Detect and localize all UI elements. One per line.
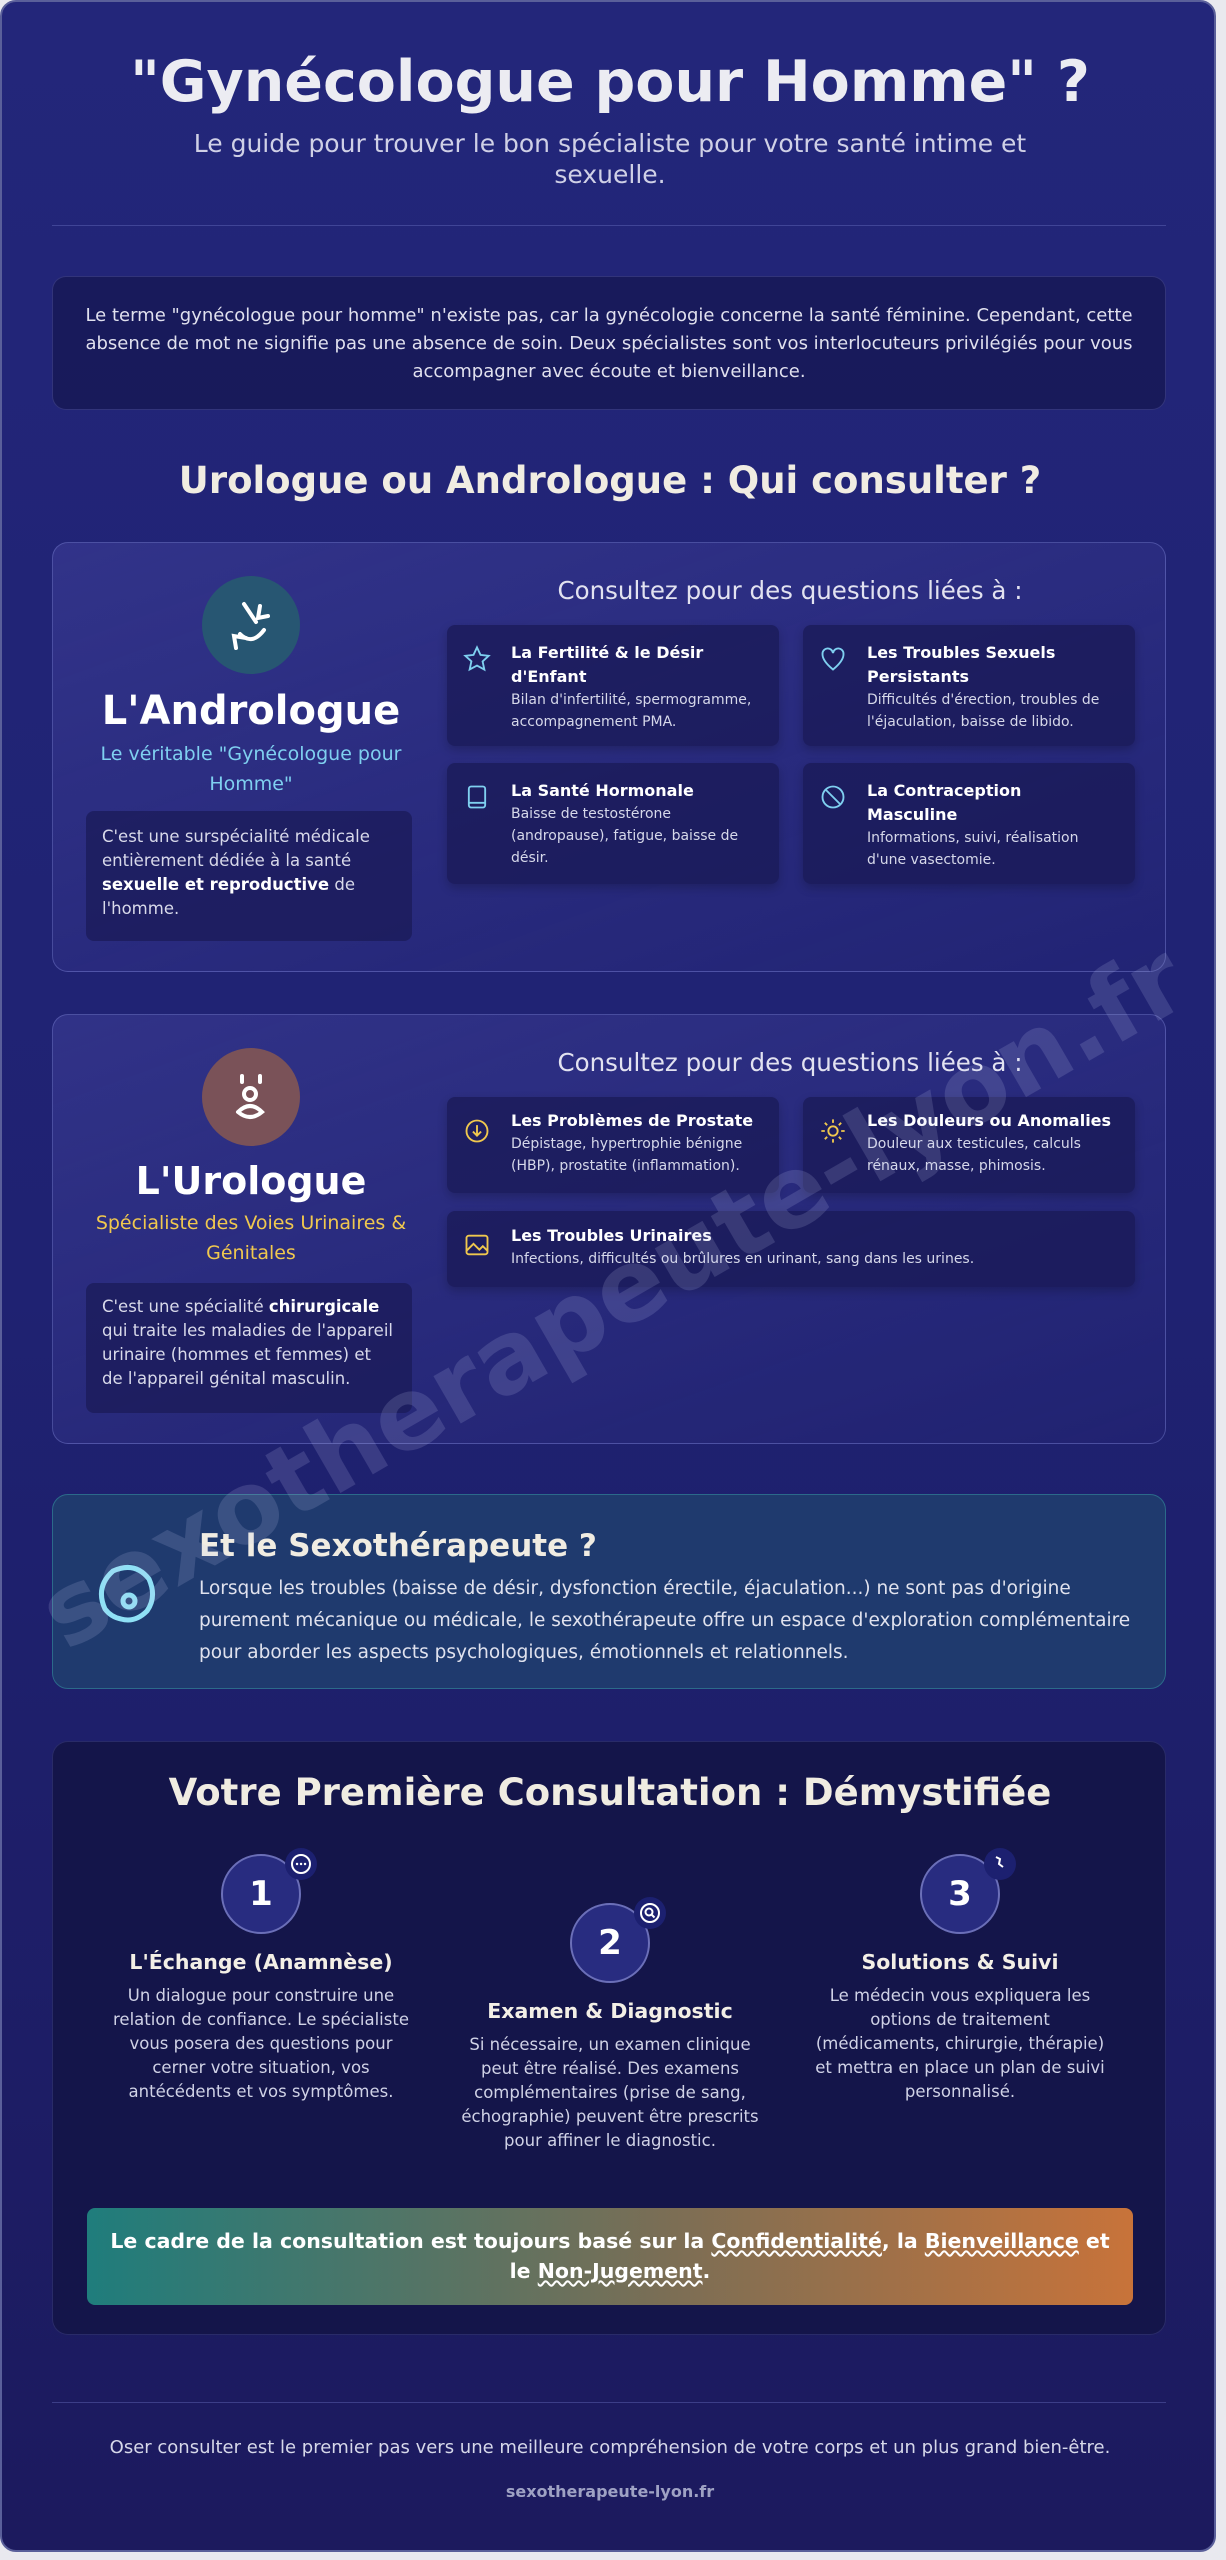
- andrologue subtitle: Le véritable "Gynécologue pour Homme": [101, 743, 401, 795]
- card: contraception: [803, 763, 1135, 884]
- step 1: [113, 1848, 409, 2101]
- card: douleurs: Douleur aux testicules, calculs rénaux, masse, phimosis.: [867, 1136, 1081, 1174]
- card: troubles sexuels: Difficultés d'érection, troubles de l'éjaculation, baisse de libido.: [867, 692, 1099, 730]
- step 1: L'Échange (Anamnèse): [129, 1950, 393, 1974]
- card: douleurs: [803, 1097, 1135, 1193]
- consultation heading: Votre Première Consultation : Démystifiée: [169, 1771, 1051, 1814]
- urologue description: C'est une spécialité chirurgicale qui traite les maladies de l'appareil urinaire (hommes et femmes) et de l'appareil génital masculin.: [102, 1297, 393, 1388]
- panel: sexotherapeute: [52, 1494, 1166, 1689]
- card: sante hormonale: Baisse de testostérone (andropause), fatigue, baisse de désir.: [511, 806, 738, 866]
- card: troubles urinaires: Les Troubles Urinaires: [511, 1226, 712, 1245]
- step 3: [815, 1848, 1105, 2101]
- step 3: Solutions & Suivi: [861, 1950, 1059, 1974]
- step 2: [461, 1897, 759, 2150]
- step 2: Examen & Diagnostic: [487, 1999, 733, 2023]
- panel: urologue: [52, 1014, 1166, 1444]
- urologue description: [86, 1283, 412, 1413]
- card: troubles sexuels: [803, 625, 1135, 746]
- card: fertilite: [447, 625, 779, 746]
- andrologue title: L'Andrologue: [102, 688, 400, 734]
- panel: consultation: [52, 1741, 1166, 2335]
- intro text block: [52, 276, 1166, 410]
- card: douleurs: Les Douleurs ou Anomalies: [867, 1111, 1111, 1130]
- footer text: Oser consulter est le premier pas vers une meilleure compréhension de votre corps et un plus grand bien-être.: [110, 2437, 1110, 2458]
- andrologue description: C'est une surspécialité médicale entièrement dédiée à la santé sexuelle et reproductive de l'homme.: [102, 827, 370, 918]
- icon: andrologue circle: [202, 576, 300, 674]
- card: prostate: Dépistage, hypertrophie bénigne (HBP), prostatite (inflammation).: [511, 1136, 742, 1174]
- card: contraception: La Contraception Masculine: [867, 781, 1021, 824]
- sexotherapeute text: Lorsque les troubles (baisse de désir, dysfonction érectile, éjaculation...) ne sont pas d'origine purement mécanique ou médicale, le sexothérapeute offre un espace d'exploration complémentaire pour aborder les aspects psychologiques, émotionnels et relationnels.: [199, 1578, 1130, 1663]
- card: fertilite: Bilan d'infertilité, spermogramme, accompagnement PMA.: [511, 692, 751, 730]
- consultez heading: Consultez pour des questions liées à :: [558, 576, 1022, 605]
- subtitle: Le guide pour trouver le bon spécialiste pour votre santé intime et sexuelle.: [194, 129, 1026, 189]
- card: prostate: [447, 1097, 779, 1193]
- card: prostate: Les Problèmes de Prostate: [511, 1111, 753, 1130]
- icon: sexotherapeute: [98, 1564, 156, 1622]
- andrologue description: [86, 811, 412, 941]
- urologue title: L'Urologue: [136, 1159, 366, 1203]
- card: troubles urinaires: Infections, difficultés ou brûlures en urinant, sang dans les urines.: [511, 1251, 974, 1267]
- intro text block: Le terme "gynécologue pour homme" n'existe pas, car la gynécologie concerne la santé féminine. Cependant, cette absence de mot ne signifie pas une absence de soin. Deux spécialistes sont vos interlocuteurs privilégiés pour vous accompagner avec écoute et bienveillance.: [85, 305, 1133, 382]
- step 2: 2: [598, 1923, 622, 1963]
- card: fertilite: La Fertilité & le Désir d'Enfant: [511, 643, 703, 686]
- footer site: sexotherapeute-lyon.fr: [506, 2482, 714, 2501]
- step 3: 3: [948, 1874, 972, 1914]
- step 3: Le médecin vous expliquera les options de traitement (médicaments, chirurgie, thérapie) et mettra en place un plan de suivi personnalisé.: [815, 1986, 1105, 2101]
- section heading: Urologue ou Andrologue : Qui consulter ?: [179, 459, 1041, 502]
- card: sante hormonale: La Santé Hormonale: [511, 781, 694, 800]
- step 2: Si nécessaire, un examen clinique peut être réalisé. Des examens complémentaires (prise de sang, échographie) peuvent être prescrits pour affiner le diagnostic.: [461, 2035, 759, 2150]
- card: troubles urinaires: [447, 1211, 1135, 1287]
- step 1: Un dialogue pour construire une relation de confiance. Le spécialiste vous posera des questions pour cerner votre situation, vos antécédents et vos symptômes.: [113, 1986, 409, 2101]
- callout banner: [87, 2208, 1133, 2305]
- consultez heading: Consultez pour des questions liées à :: [558, 1048, 1022, 1077]
- callout banner: Le cadre de la consultation est toujours basé sur la Confidentialité, la Bienveillance et le Non-Jugement.: [110, 2229, 1110, 2283]
- watermark: sexotherapeute-lyon.fr: [20, 920, 1206, 1672]
- card: contraception: Informations, suivi, réalisation d'une vasectomie.: [867, 830, 1078, 868]
- card: sante hormonale: [447, 763, 779, 884]
- step 1: 1: [249, 1874, 273, 1914]
- urologue subtitle: Spécialiste des Voies Urinaires & Génitales: [96, 1212, 406, 1264]
- title: "Gynécologue pour Homme" ?: [130, 49, 1090, 115]
- sexotherapeute title: Et le Sexothérapeute ?: [199, 1528, 597, 1564]
- card: troubles sexuels: Les Troubles Sexuels Persistants: [867, 643, 1055, 686]
- icon: urologue circle: [202, 1048, 300, 1146]
- panel: andrologue: [52, 542, 1166, 972]
